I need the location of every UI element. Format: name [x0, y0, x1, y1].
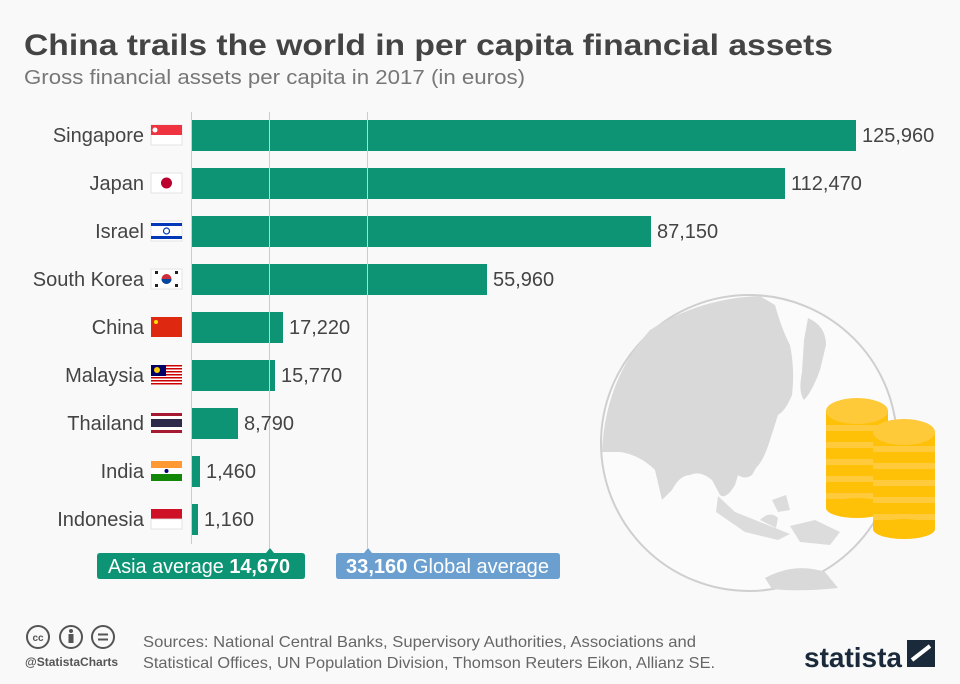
flag: Malaysia: [151, 365, 182, 385]
value labels: 125,960: [862, 125, 934, 147]
handle: @StatistaCharts: [25, 655, 118, 669]
flag: China: [151, 317, 182, 337]
callout: Global average: 33,160 Global average: [346, 556, 549, 578]
callout: Global average: [336, 548, 560, 579]
flag: Japan: [151, 173, 182, 193]
license icons: [27, 626, 114, 648]
country labels: China: [92, 317, 145, 339]
country labels: India: [101, 461, 145, 483]
country labels: Singapore: [53, 125, 144, 147]
sources: Statistical Offices, UN Population Division, Thomson Reuters Eikon, Allianz SE.: [143, 655, 715, 672]
value labels: 55,960: [493, 269, 554, 291]
illustration: coins: [826, 398, 935, 539]
country labels: Japan: [90, 173, 144, 195]
country labels: Indonesia: [57, 509, 145, 531]
illustration: globe: [601, 295, 897, 591]
value labels: 87,150: [657, 221, 718, 243]
country labels: [33, 125, 145, 531]
value labels: [204, 125, 934, 531]
flag: South Korea: [151, 269, 182, 289]
title: China trails the world in per capita financial assets: [24, 29, 833, 62]
subtitle: Gross financial assets per capita in 2017 (in euros): [24, 67, 525, 89]
bar chart: [192, 120, 856, 535]
axis line: [190, 112, 192, 544]
flag: Israel: [151, 221, 182, 241]
reference lines: [270, 112, 368, 548]
country labels: Thailand: [67, 413, 144, 435]
country labels: Israel: [95, 221, 144, 243]
flag: India: [151, 461, 182, 481]
country labels: Malaysia: [65, 365, 145, 387]
value labels: 17,220: [289, 317, 350, 339]
callout: Asia average: [97, 548, 305, 579]
flags: [151, 125, 182, 529]
flag: Thailand: [151, 413, 182, 433]
flag: Indonesia: [151, 509, 182, 529]
value labels: 112,470: [791, 173, 862, 195]
value labels: 15,770: [281, 365, 342, 387]
license icons: cc: [32, 633, 44, 644]
statista logo: statista: [804, 642, 902, 673]
flag: Singapore: [151, 125, 182, 145]
value labels: 1,460: [206, 461, 256, 483]
value labels: 1,160: [204, 509, 254, 531]
country labels: South Korea: [33, 269, 145, 291]
value labels: 8,790: [244, 413, 294, 435]
sources: Sources: National Central Banks, Supervisory Authorities, Associations and: [143, 634, 696, 651]
callout: Asia average: Asia average 14,670: [108, 556, 290, 578]
